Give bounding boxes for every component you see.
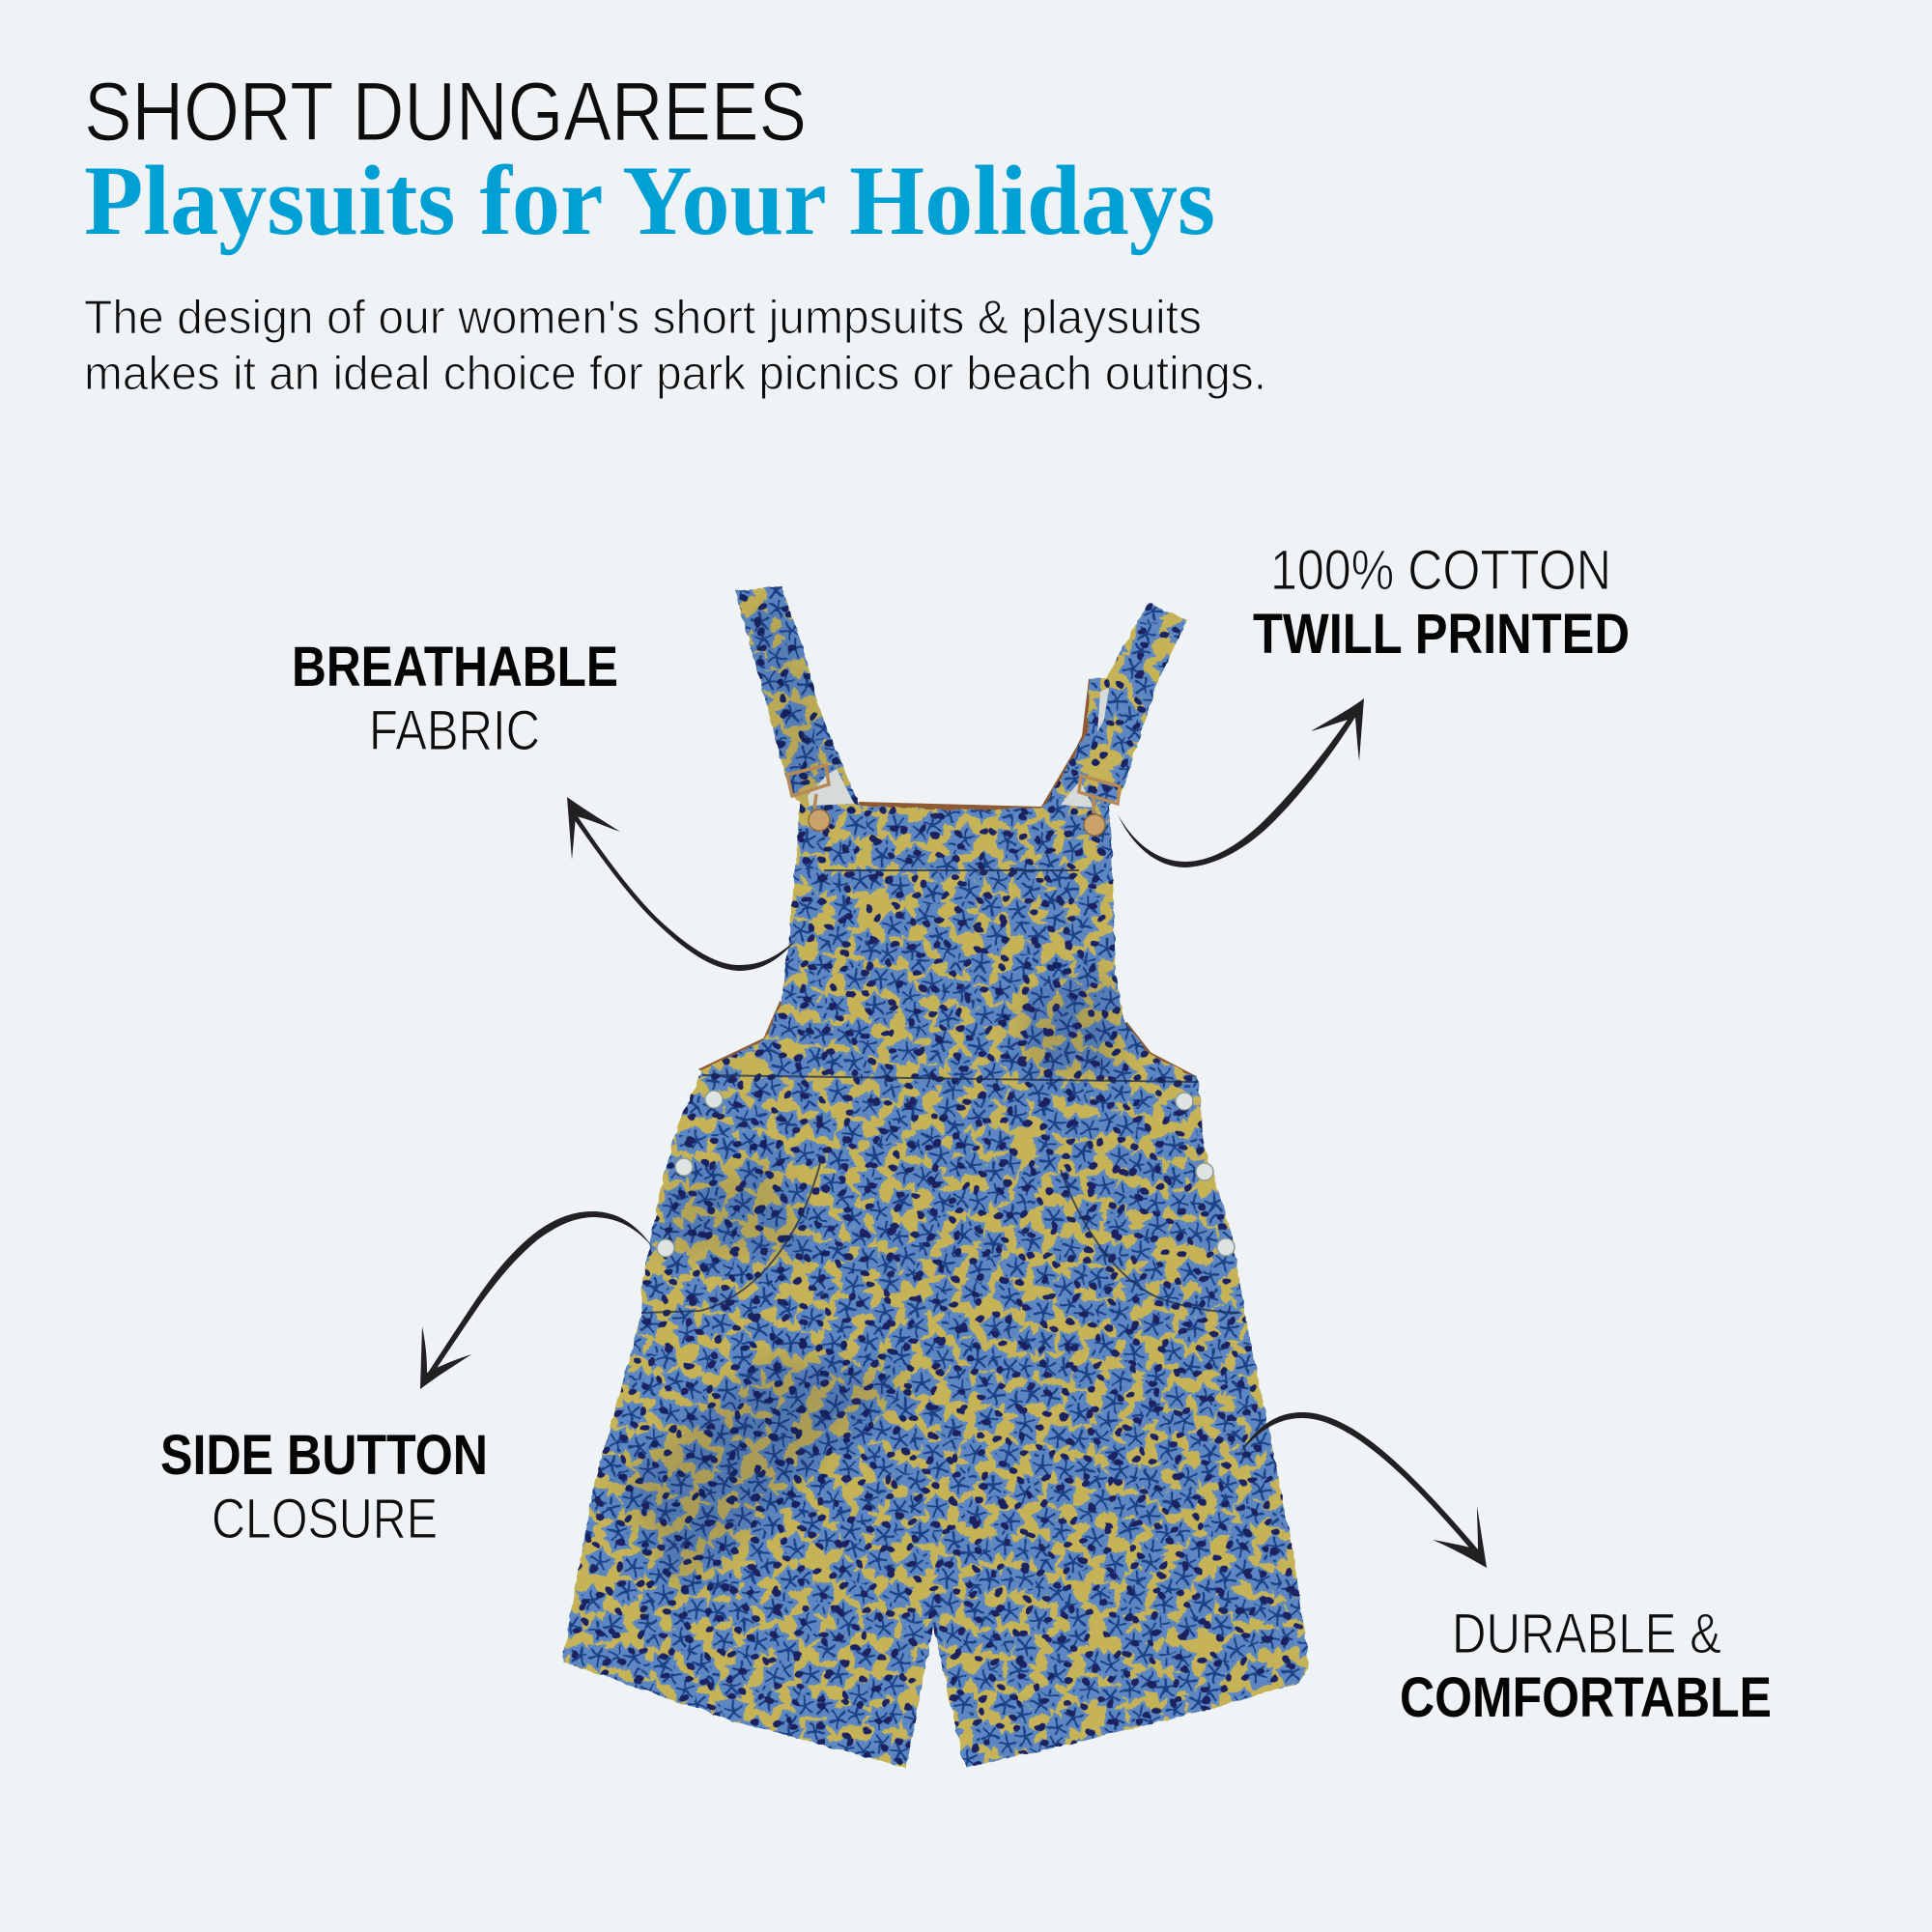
fabric shading: [618, 599, 1121, 1594]
arrow: durable: [1239, 1412, 1487, 1568]
arrow: side button: [420, 1211, 654, 1389]
arrow: breathable fabric: [567, 797, 797, 971]
callout: side button closure: CLOSURE: [212, 1488, 438, 1550]
callout: side button closure: SIDE BUTTON: [160, 1424, 488, 1487]
metal buttons: [809, 810, 1105, 836]
strap buckles: [787, 765, 1120, 813]
callout: breathable fabric: FABRIC: [369, 699, 540, 762]
heading: playsuits: Playsuits for Your Holidays: [84, 146, 1215, 256]
side buttons: [657, 1091, 1235, 1257]
callout: cotton twill: [1253, 539, 1630, 666]
callout: side button closure: [160, 1424, 488, 1550]
arrow: cotton twill: [1118, 698, 1364, 867]
garment: short dungarees: [551, 580, 1323, 1777]
seams: [641, 870, 1240, 1313]
intro text: The design of our women's short jumpsuits & playsuits: [84, 292, 1202, 344]
callout: cotton twill: 100% COTTON: [1270, 539, 1611, 602]
callout: breathable fabric: [292, 636, 618, 762]
callout: cotton twill: TWILL PRINTED: [1253, 603, 1630, 666]
strap lining: [808, 688, 1109, 808]
callout: durable comfortable: COMFORTABLE: [1400, 1666, 1772, 1729]
callout: breathable fabric: BREATHABLE: [292, 636, 618, 698]
callout: durable comfortable: DURABLE &: [1452, 1603, 1721, 1665]
intro text: makes it an ideal choice for park picnics or beach outings.: [84, 348, 1266, 400]
title: [84, 66, 1215, 256]
fabric body: [551, 580, 1323, 1777]
callout: durable comfortable: [1400, 1603, 1772, 1729]
brown inner edge: [702, 679, 1196, 1078]
heading: short dungarees: SHORT DUNGAREES: [84, 66, 807, 158]
intro text: [84, 292, 1266, 400]
